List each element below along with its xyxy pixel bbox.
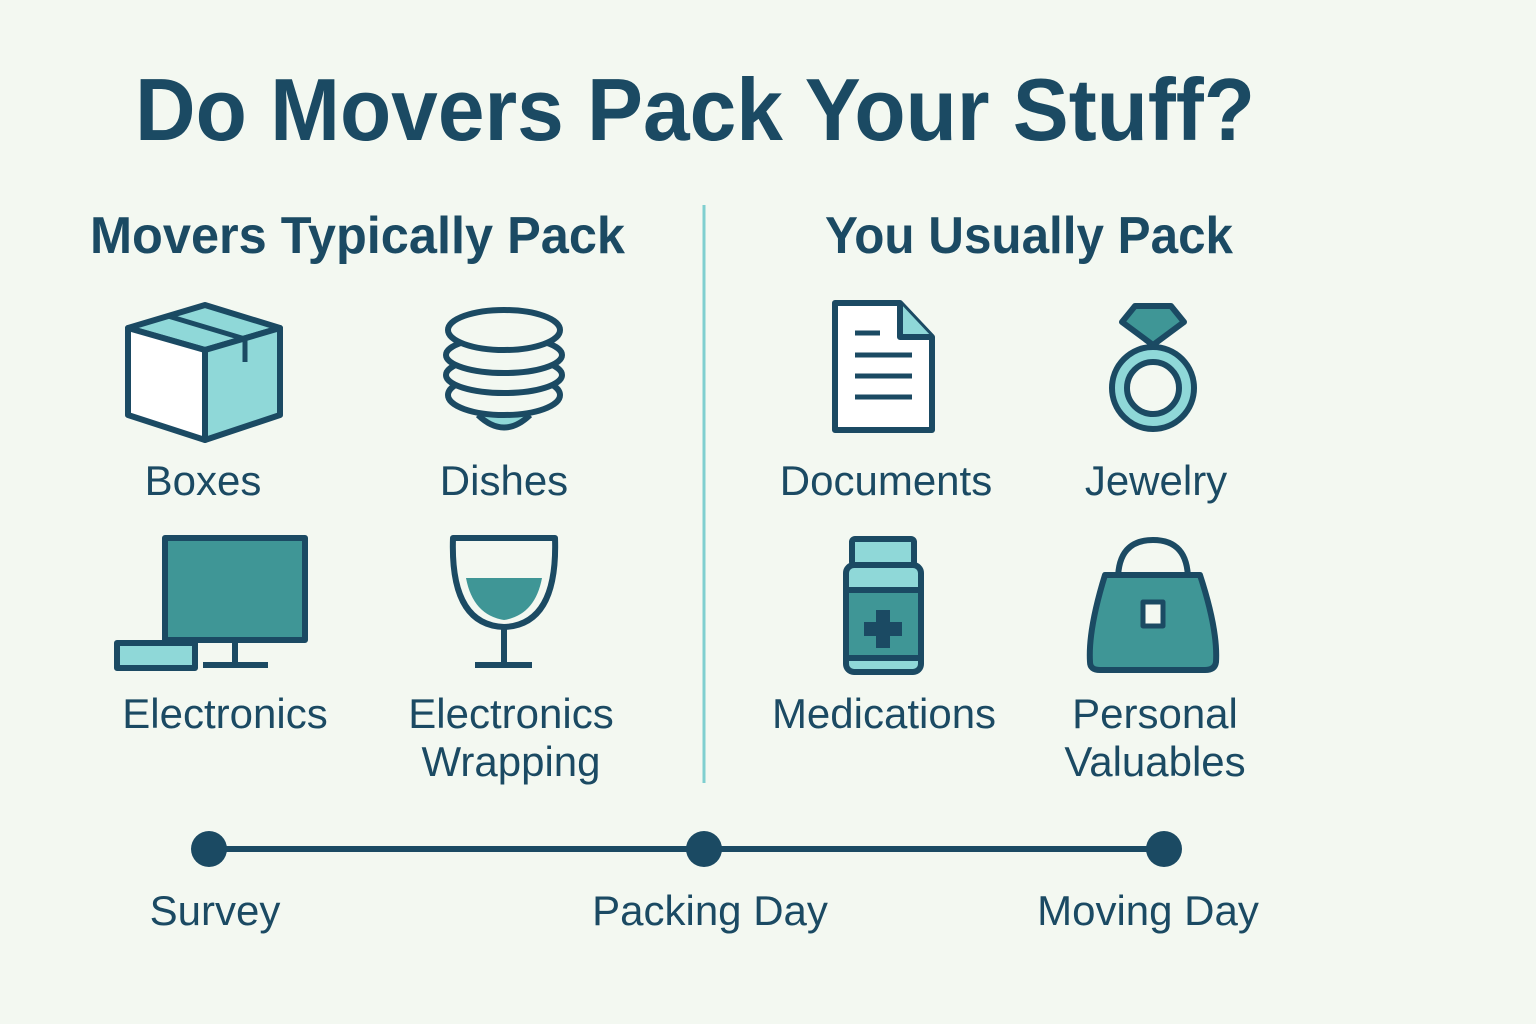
label: electronics: Electronics bbox=[122, 690, 328, 737]
icon: medication bbox=[846, 539, 921, 672]
title: Do Movers Pack Your Stuff? bbox=[135, 60, 1255, 159]
label: dishes: Dishes bbox=[440, 457, 568, 504]
icon: box bbox=[128, 305, 280, 440]
icon: handbag bbox=[1090, 540, 1216, 670]
label: boxes: Boxes bbox=[145, 457, 261, 504]
icon: document bbox=[835, 303, 932, 430]
label: moving day: Moving Day bbox=[1037, 887, 1259, 934]
heading: movers typically pack: Movers Typically Pack bbox=[90, 207, 625, 265]
label: electronics wrapping: Electronics bbox=[408, 690, 614, 737]
icon: dishes bbox=[446, 310, 562, 428]
label: documents: Documents bbox=[780, 457, 992, 504]
label: jewelry: Jewelry bbox=[1085, 457, 1227, 504]
label: medications: Medications bbox=[772, 690, 996, 737]
icon: wine glass bbox=[453, 538, 555, 665]
label: electronics wrapping: Wrapping bbox=[422, 738, 600, 785]
label: personal valuables: Valuables bbox=[1064, 738, 1246, 785]
panel: you pack items bbox=[835, 303, 1216, 672]
label: survey: Survey bbox=[150, 887, 280, 934]
label: packing day: Packing Day bbox=[592, 887, 828, 934]
panel: movers pack items bbox=[117, 305, 562, 668]
heading: you usually pack: You Usually Pack bbox=[825, 207, 1233, 265]
label: personal valuables: Personal bbox=[1072, 690, 1238, 737]
icon: ring bbox=[1112, 306, 1194, 429]
icon: electronics bbox=[117, 538, 305, 668]
timeline bbox=[150, 831, 1259, 934]
